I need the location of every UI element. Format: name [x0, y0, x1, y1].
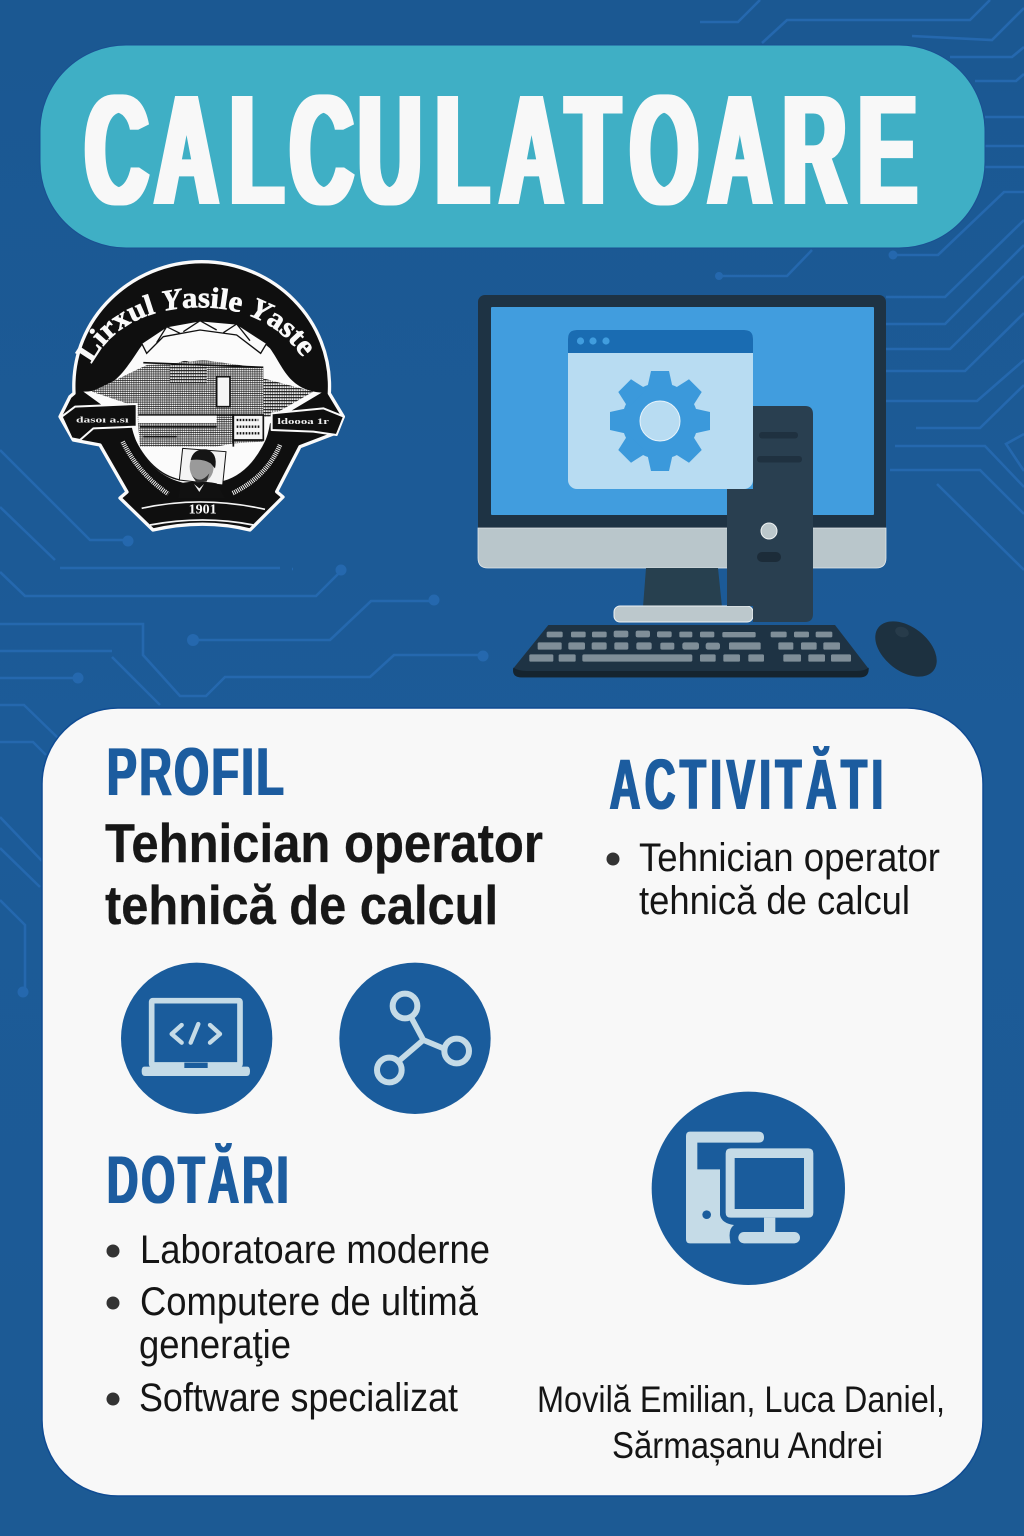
equipment list: Laboratoare moderne	[140, 1228, 490, 1272]
activities list	[606, 836, 940, 923]
keyboard	[513, 625, 869, 677]
icon: laptop code	[121, 963, 272, 1114]
activities list: tehnică de calcul	[639, 879, 910, 923]
authors	[537, 1379, 945, 1466]
circuit traces background	[0, 0, 1024, 990]
logo right ribbon	[272, 408, 344, 435]
title: CALCULATOARE	[85, 62, 917, 237]
icon: network nodes	[339, 963, 491, 1114]
logo arc lettering	[92, 307, 311, 371]
circuit nodes	[18, 250, 898, 998]
settings window	[568, 330, 753, 489]
heading: activitati: ACTIVITĂTI	[610, 745, 883, 825]
logo year banner: 1901	[189, 502, 217, 517]
logo left ribbon	[62, 404, 137, 440]
logo laurels	[123, 442, 280, 494]
logo truss arch	[142, 321, 267, 353]
mouse	[865, 610, 947, 688]
tower	[727, 406, 813, 622]
school logo	[58, 260, 345, 532]
profile title: tehnică de calcul	[105, 874, 498, 936]
profile title	[105, 812, 543, 936]
computer illustration	[478, 295, 947, 688]
heading: profil: PROFIL	[107, 735, 284, 810]
equipment list: Software specializat	[139, 1376, 458, 1420]
logo building	[92, 360, 313, 447]
icon: desktop computer	[652, 1092, 845, 1285]
logo year banner	[142, 502, 265, 525]
authors: Movilă Emilian, Luca Daniel,	[537, 1379, 945, 1420]
authors: Sărmașanu Andrei	[612, 1425, 883, 1466]
monitor	[478, 295, 886, 622]
equipment list: generaţie	[139, 1323, 291, 1367]
school logo: Lirxul Yasile Yaste	[75, 287, 312, 364]
heading: dotari: DOTĂRI	[107, 1142, 289, 1218]
logo left ribbon: dasoı a.sı	[76, 414, 130, 424]
logo portrait	[178, 448, 226, 498]
equipment list: Computere de ultimă	[140, 1280, 479, 1324]
activities list: Tehnician operator	[639, 836, 940, 880]
logo centre	[83, 328, 322, 485]
profile title: Tehnician operator	[105, 812, 543, 874]
information panel	[42, 708, 983, 1496]
title banner	[40, 45, 985, 248]
logo right ribbon: ldoooa 1r	[277, 416, 329, 426]
icon: gear	[610, 371, 710, 471]
equipment list	[106, 1228, 490, 1420]
